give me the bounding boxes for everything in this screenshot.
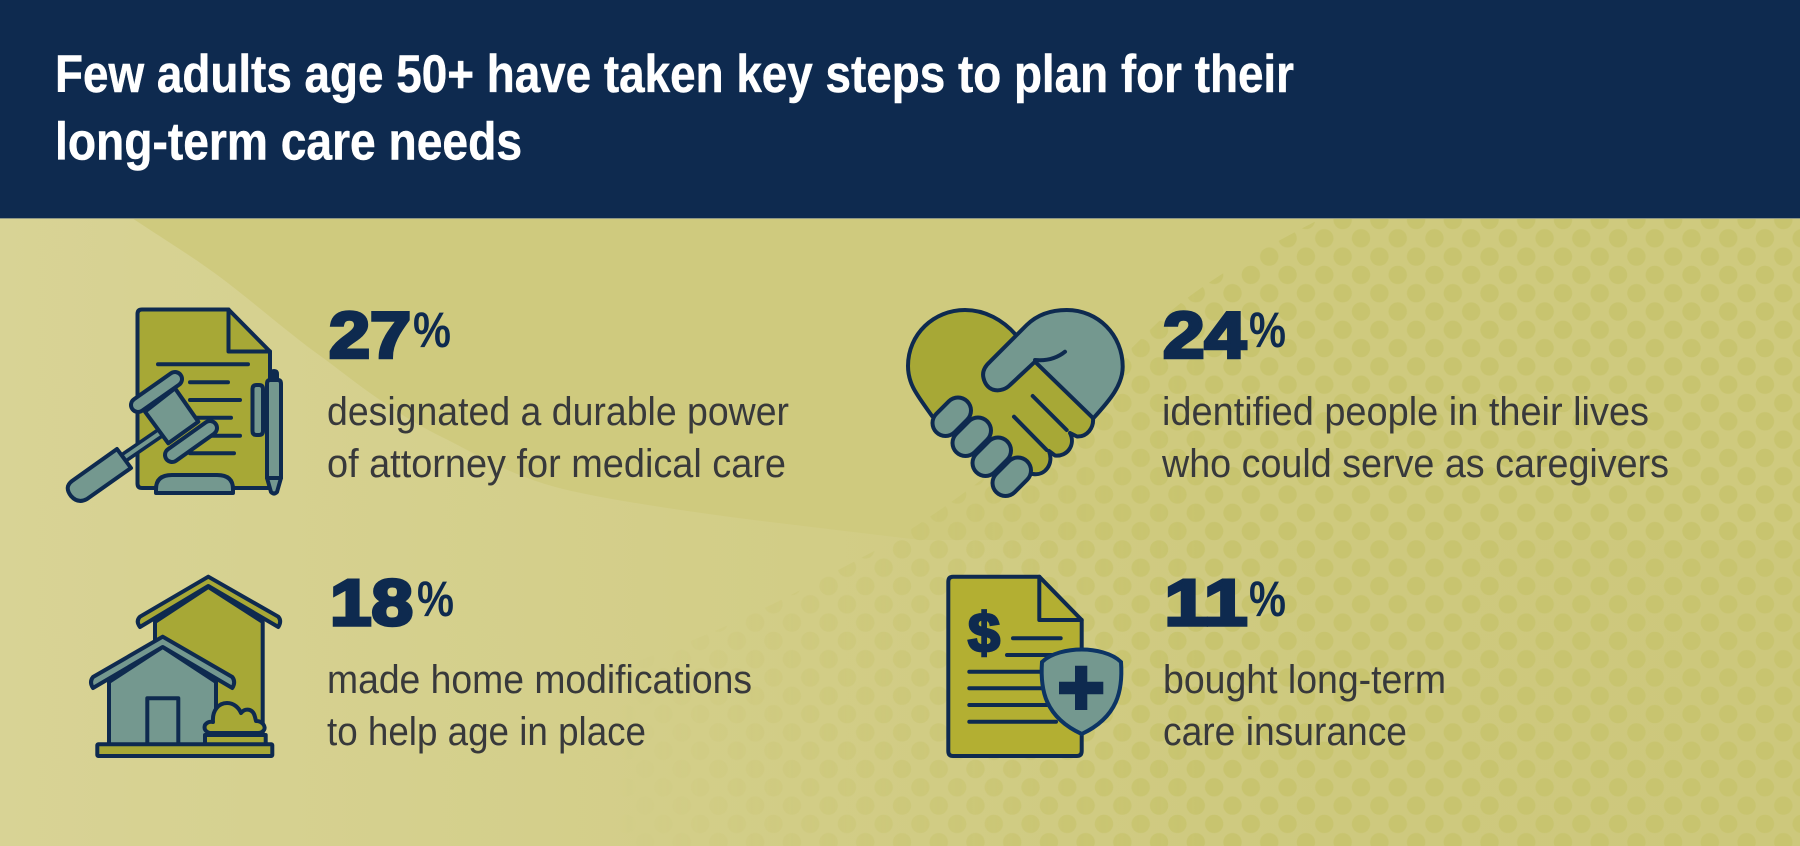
description: to help age in place [327,710,646,754]
title: long-term care needs [55,112,522,172]
description: bought long-term [1163,658,1446,702]
description: identified people in their lives [1162,390,1649,434]
icon: houses [91,577,280,756]
panel: caregivers [908,298,1669,486]
statistic: 18%: % [417,571,454,627]
panel: durable power of attorney [68,298,789,501]
statistic: 27%: 27 [329,298,411,372]
description: care insurance [1163,710,1407,754]
description: designated a durable power [327,390,789,434]
icon: insurance document with shield [948,577,1121,756]
statistic: 11% [1164,566,1286,639]
icon: document with gavel and pen [68,310,281,501]
description: of attorney for medical care [327,442,786,486]
statistic: 11%: 11 [1164,566,1248,639]
title [55,45,1294,172]
statistic: 24%: % [1249,302,1286,358]
background [0,218,1800,846]
description [327,658,752,754]
statistic: 27% [329,298,451,372]
panel: long-term care insurance [948,566,1446,756]
description [1161,390,1669,486]
description: who could serve as caregivers [1161,442,1669,486]
statistic: 18% [330,566,454,639]
description: made home modifications [327,658,752,702]
icon: heart handshake [908,310,1123,483]
statistic: 11%: % [1249,571,1286,627]
description [1163,658,1446,754]
icon: dollar sign: $ [968,601,1000,664]
statistic: 18%: 18 [330,566,413,639]
description [327,390,789,486]
panel: home modifications [91,566,752,756]
statistic: 24% [1163,298,1286,372]
statistic: 24%: 24 [1163,298,1246,372]
title: Few adults age 50+ have taken key steps to plan for their [55,45,1294,104]
statistic: 27%: % [413,302,451,358]
header banner [0,0,1800,219]
